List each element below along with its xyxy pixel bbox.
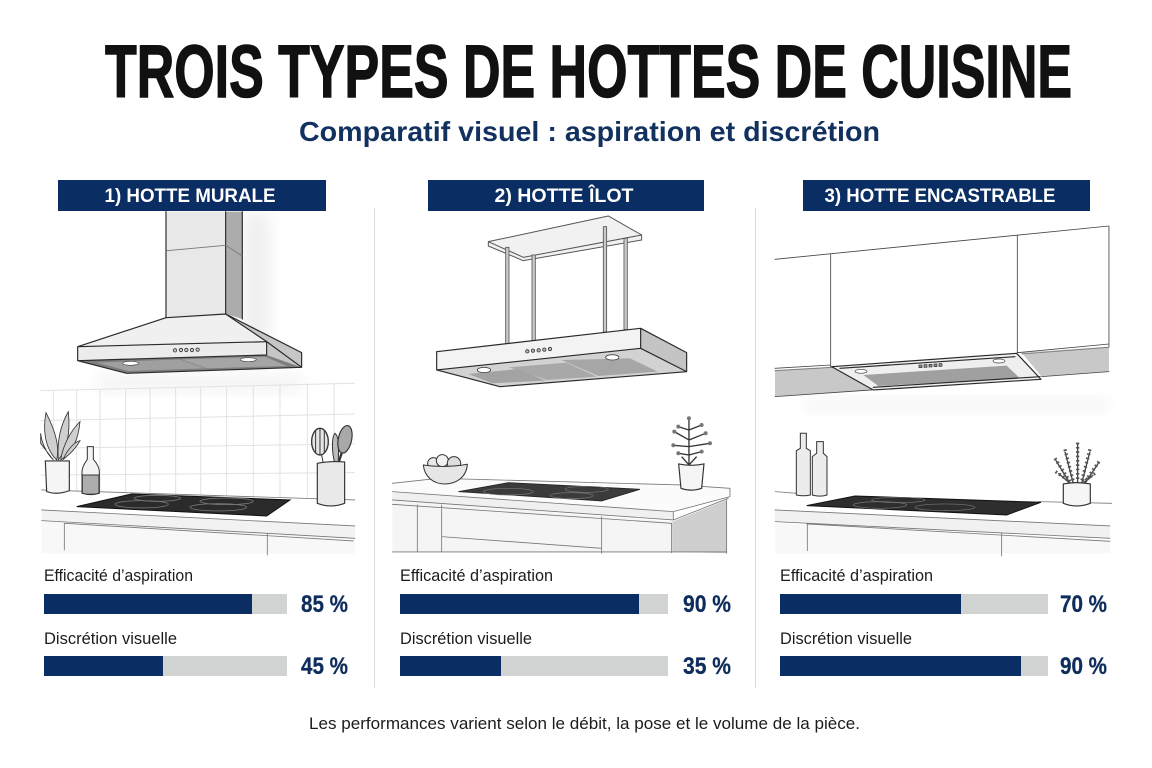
value: 70: 70 % xyxy=(1060,591,1107,618)
plant xyxy=(41,412,80,493)
metric label: efficacite: Efficacité d’aspiration xyxy=(780,566,933,585)
panel: hotte ilot xyxy=(392,180,731,680)
metric label: discretion: Discrétion visuelle xyxy=(780,629,912,648)
ceiling plate xyxy=(488,216,642,261)
bar: discretion 35 xyxy=(400,656,668,676)
heading: hotte encastrable: 3) HOTTE ENCASTRABLE xyxy=(824,186,1056,207)
wall cabinets xyxy=(775,226,1109,397)
bar: efficacite 90 xyxy=(400,594,668,614)
chimney xyxy=(166,212,242,319)
built-in hood xyxy=(832,353,1041,390)
canopy xyxy=(78,314,302,373)
value: 85: 85 % xyxy=(301,591,348,618)
panel: hotte encastrable xyxy=(775,180,1112,680)
island counter xyxy=(392,478,730,553)
worktop xyxy=(42,490,355,555)
illustration: hotte murale xyxy=(41,212,355,555)
rods xyxy=(506,227,627,344)
bar: efficacite 85 xyxy=(44,594,287,614)
fruit bowl xyxy=(423,455,467,484)
footer note: Les performances varient selon le débit, la pose et le volume de la pièce. xyxy=(309,714,860,733)
value: 45: 45 % xyxy=(301,653,348,680)
illustration: hotte encastrable xyxy=(775,226,1112,556)
heading: hotte murale: 1) HOTTE MURALE xyxy=(104,186,276,207)
heading: hotte ilot xyxy=(428,180,704,211)
worktop xyxy=(775,492,1112,556)
illustration: hotte ilot xyxy=(392,216,730,553)
value: 35: 35 % xyxy=(683,653,731,680)
herb plant xyxy=(1055,443,1099,506)
bar: discretion 45 xyxy=(44,656,287,676)
heading: hotte ilot: 2) HOTTE ÎLOT xyxy=(494,185,634,207)
metric label: efficacite: Efficacité d’aspiration xyxy=(400,566,553,585)
heading: hotte encastrable xyxy=(803,180,1090,211)
utensils xyxy=(312,424,354,506)
value: 90: 90 % xyxy=(683,591,731,618)
bottles xyxy=(796,433,827,496)
oil bottle xyxy=(82,447,99,495)
bar: discretion 90 xyxy=(780,656,1048,676)
island canopy xyxy=(437,328,687,387)
metric label: efficacite: Efficacité d’aspiration xyxy=(44,566,193,585)
column divider 2 xyxy=(755,208,756,688)
heading: hotte murale xyxy=(58,180,326,211)
column divider 1 xyxy=(374,208,375,688)
panel: hotte murale xyxy=(41,180,355,680)
bar: efficacite 70 xyxy=(780,594,1048,614)
value: 90: 90 % xyxy=(1060,653,1107,680)
herb plant xyxy=(671,416,712,490)
metric label: discretion: Discrétion visuelle xyxy=(400,629,532,648)
subtitle: Comparatif visuel : aspiration et discrétion xyxy=(299,116,880,147)
metric label: discretion: Discrétion visuelle xyxy=(44,629,177,648)
